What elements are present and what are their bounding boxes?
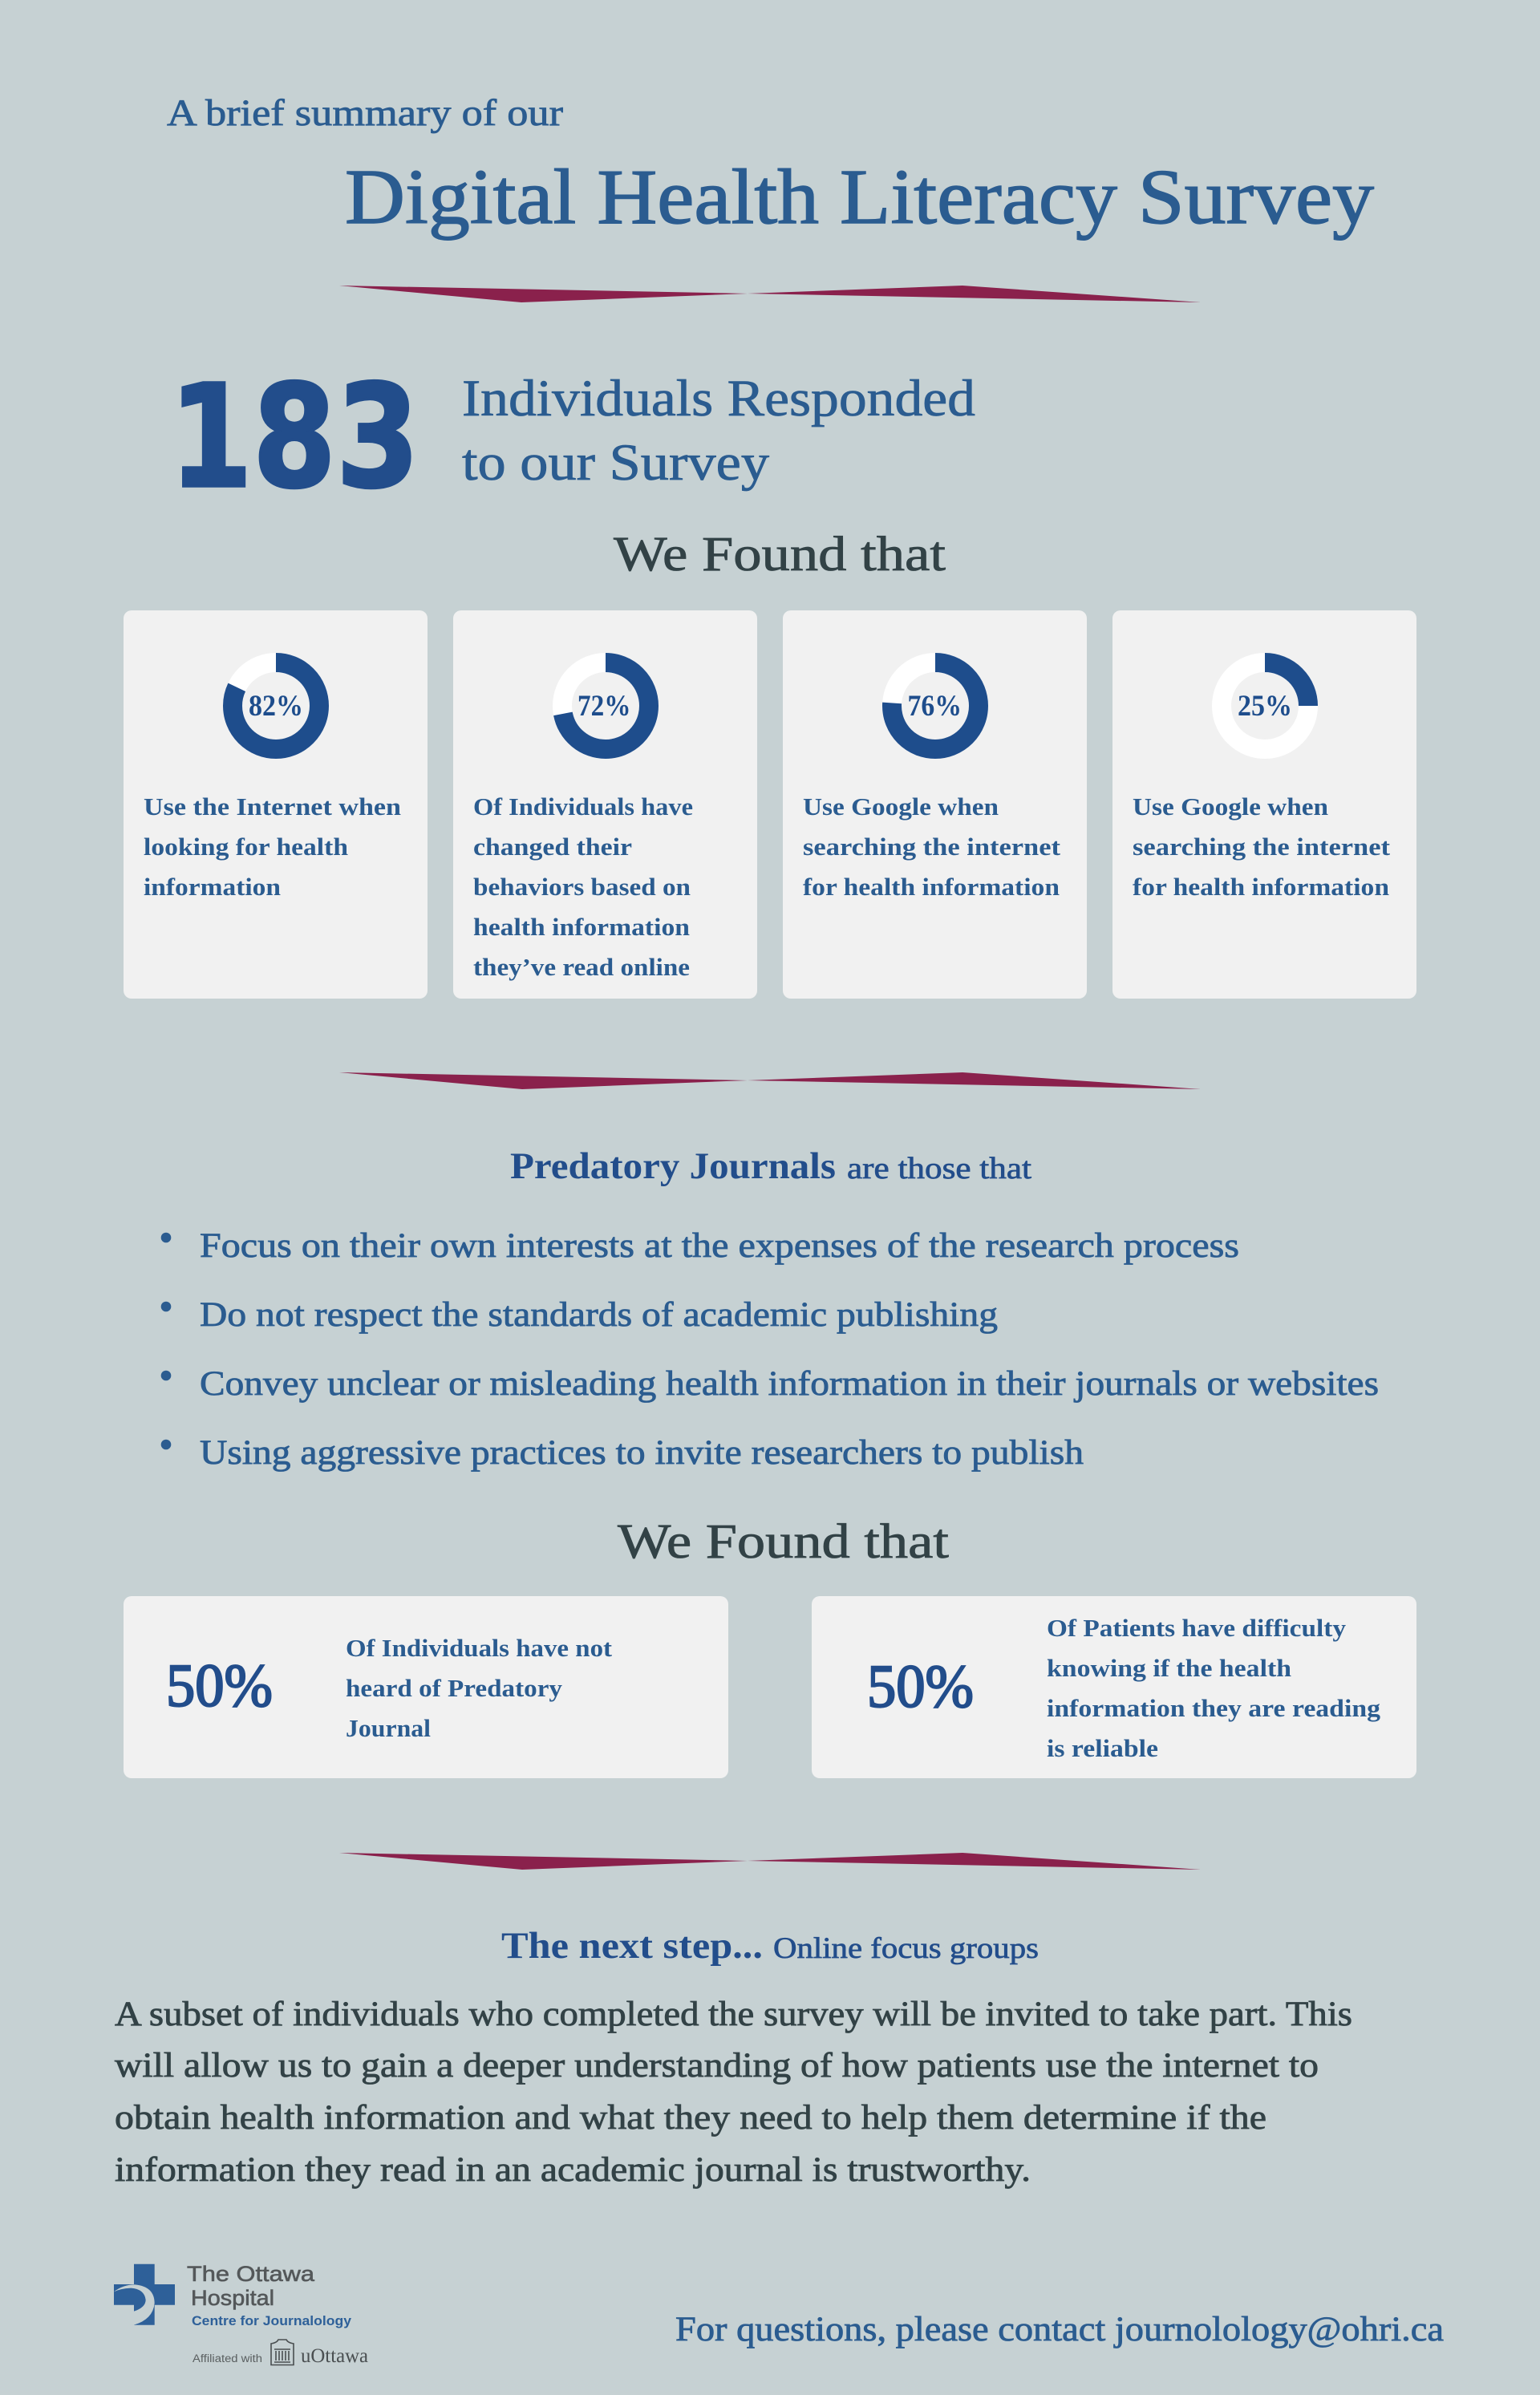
centre name: Centre for Journalology <box>192 2313 352 2328</box>
card text: for health information <box>1133 873 1389 901</box>
heading: we found that (first): We Found that <box>614 528 946 582</box>
donut chart 25% <box>1222 663 1308 749</box>
stat description: is reliable <box>1047 1734 1158 1762</box>
stat description: Journal <box>346 1714 431 1742</box>
card text: searching the internet <box>1133 833 1391 861</box>
stat description <box>1047 1614 1381 1762</box>
stat description: information they are reading <box>1047 1694 1381 1722</box>
hospital name <box>187 2262 315 2310</box>
card text: for health information <box>803 873 1060 901</box>
stat description: Of Individuals have not <box>346 1634 613 1662</box>
card text <box>1133 792 1391 901</box>
donut chart 82% <box>233 663 319 749</box>
hospital name: Hospital <box>191 2286 274 2310</box>
paragraph: next step description: will allow us to gain a deeper understanding of how patients use the internet to <box>115 2047 1319 2085</box>
panel: 50% not heard <box>124 1596 728 1778</box>
heading: we found that (second): We Found that <box>618 1515 949 1569</box>
bullet list <box>161 1227 1379 1472</box>
bullet 2: Do not respect the standards of academic publishing <box>200 1296 998 1334</box>
heading: predatory journals: Predatory Journals <box>510 1145 836 1187</box>
paragraph: next step description: A subset of individuals who completed the survey will be invited to take part. This <box>115 1996 1352 2033</box>
panel: stat card 82% <box>124 610 428 999</box>
divider: lower <box>339 1853 1201 1870</box>
divider: middle <box>339 1072 1201 1089</box>
title: Digital Health Literacy Survey <box>345 154 1374 241</box>
stat 50%: 50% <box>166 1652 273 1720</box>
affiliation: Affiliated with <box>192 2352 262 2365</box>
intro line: A brief summary of our <box>167 92 563 134</box>
respondent label: to our Survey <box>462 434 770 492</box>
stat description: knowing if the health <box>1047 1654 1291 1682</box>
card text: Use Google when <box>803 792 999 821</box>
card text: Use the Internet when <box>144 792 401 821</box>
heading: the next step: Online focus groups <box>773 1932 1039 1965</box>
respondent label <box>462 370 975 492</box>
stat description: heard of Predatory <box>346 1674 563 1702</box>
uOttawa wordmark: uOttawa <box>301 2345 368 2367</box>
bullet 4: Using aggressive practices to invite researchers to publish <box>200 1434 1084 1472</box>
icon: uOttawa building <box>271 2340 294 2365</box>
card text: behaviors based on <box>473 873 691 901</box>
respondent label: Individuals Responded <box>462 370 975 428</box>
card text: information <box>144 873 281 901</box>
donut chart 76%: 76% <box>908 690 962 723</box>
hospital name: The Ottawa <box>187 2262 315 2286</box>
card text: Of Individuals have <box>473 792 693 821</box>
heading: predatory journals: are those that <box>847 1152 1031 1185</box>
panel: stat card 25% <box>1112 610 1416 999</box>
stat 50%: 50% <box>867 1653 974 1720</box>
big number 183: 183 <box>169 355 419 520</box>
divider: top <box>339 286 1201 302</box>
card text <box>144 792 401 901</box>
card text: searching the internet <box>803 833 1061 861</box>
bullet 3: Convey unclear or misleading health information in their journals or websites <box>200 1365 1379 1403</box>
stat description: Of Patients have difficulty <box>1047 1614 1347 1642</box>
panel: stat card 72% <box>453 610 757 999</box>
panel: stat card 76% <box>783 610 1087 999</box>
contact line: For questions, please contact journolology@ohri.ca <box>675 2311 1444 2348</box>
icon: hospital cross <box>114 2264 175 2325</box>
donut chart 82%: 82% <box>249 690 303 723</box>
card text: they’ve read online <box>473 953 690 981</box>
card text <box>473 792 693 981</box>
stat description <box>346 1634 613 1742</box>
paragraph: next step description: information they read in an academic journal is trustworthy. <box>115 2151 1031 2189</box>
donut chart 76% <box>892 663 979 749</box>
heading: the next step: The next step... <box>501 1925 763 1967</box>
donut chart 25%: 25% <box>1238 690 1292 723</box>
paragraph: next step description <box>115 1996 1352 2189</box>
bullet 1: Focus on their own interests at the expenses of the research process <box>200 1227 1239 1265</box>
respondent count <box>169 355 975 520</box>
card text <box>803 792 1061 901</box>
panel: 50% difficulty <box>812 1596 1416 1778</box>
heading: predatory journals <box>510 1145 1031 1187</box>
card text: changed their <box>473 833 632 861</box>
paragraph: next step description: obtain health information and what they need to help them determine if the <box>115 2099 1266 2137</box>
card text: health information <box>473 913 690 941</box>
card text: looking for health <box>144 833 348 861</box>
card text: Use Google when <box>1133 792 1328 821</box>
heading: the next step <box>501 1925 1039 1967</box>
donut chart 72% <box>562 663 649 749</box>
logo: The Ottawa Hospital <box>114 2262 368 2367</box>
donut chart 72%: 72% <box>578 690 630 723</box>
